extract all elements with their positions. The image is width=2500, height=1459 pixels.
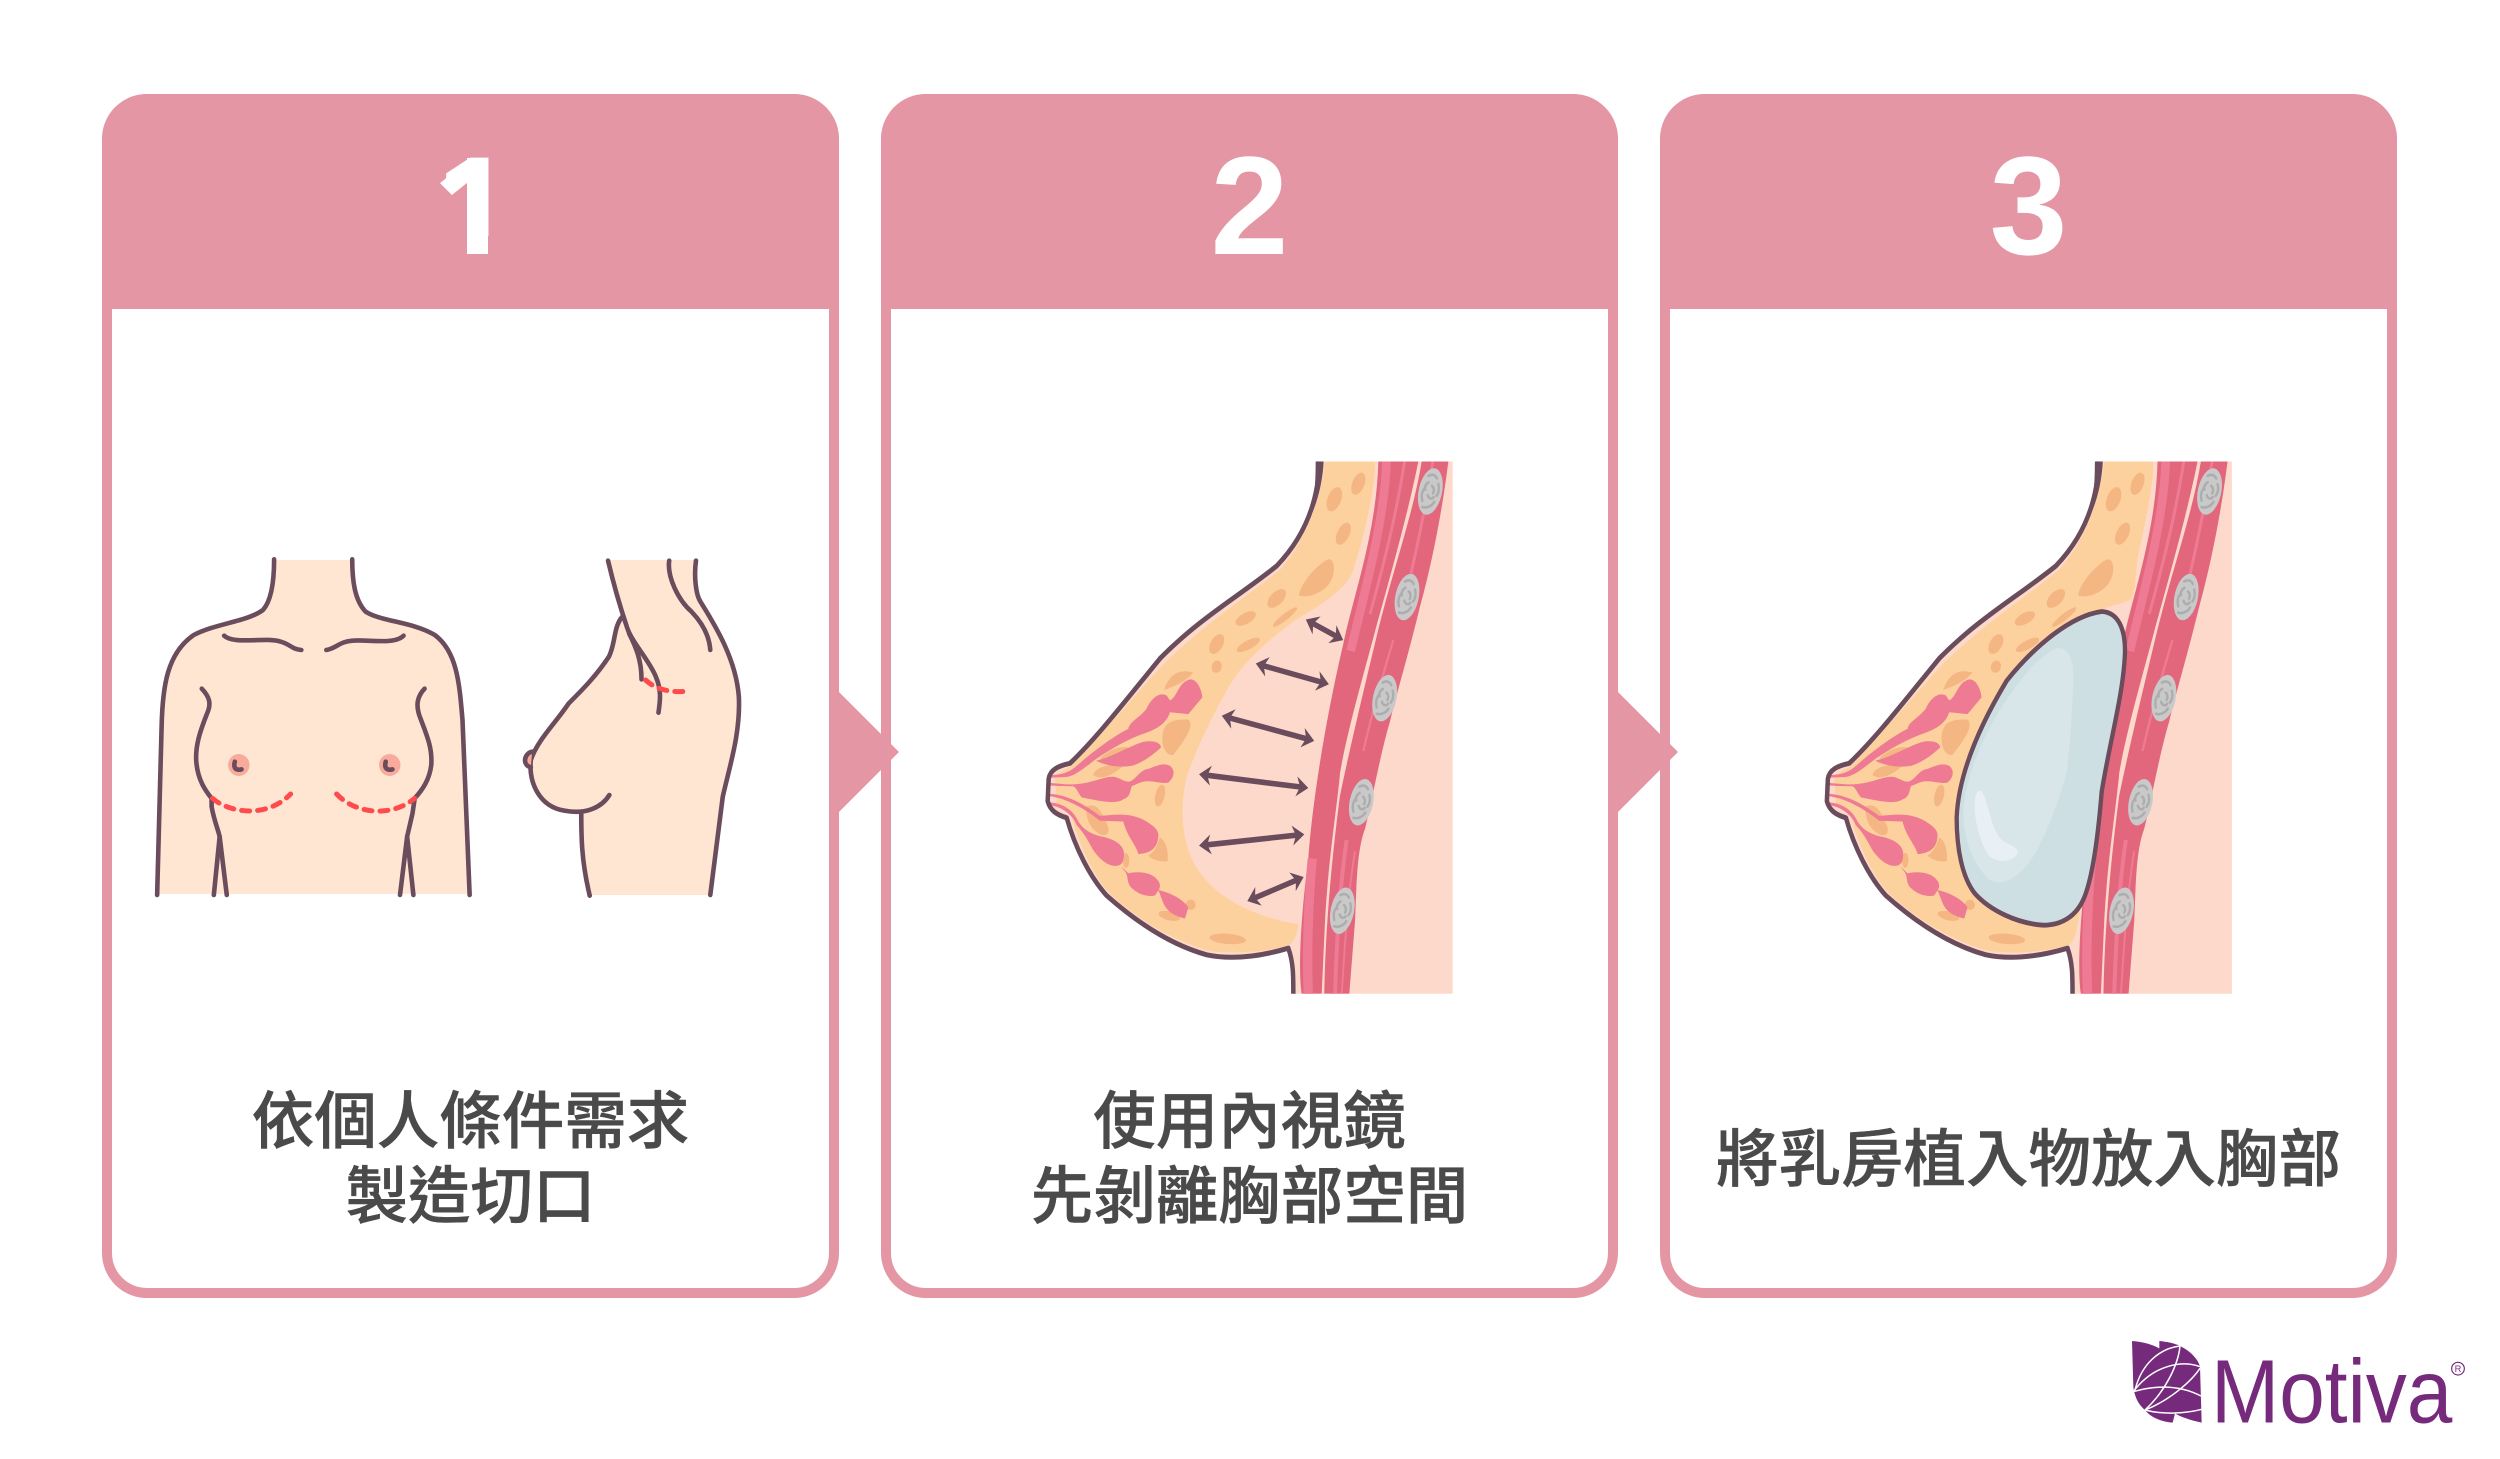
heading: step number 3: 3: [1990, 127, 2067, 284]
arrow: step 1 to step 2: [838, 691, 899, 813]
fatty tissue: [1834, 461, 2153, 952]
registered mark: [2452, 1362, 2464, 1375]
heading: step number 2: 2: [1211, 127, 1288, 284]
text: step 1 caption: 製造切口: [346, 1162, 596, 1232]
illustration: breast cross-section with implant: [1826, 459, 2232, 996]
arrow: step 2 to step 3: [1617, 691, 1678, 813]
illustration: breast cross-section with dissection arrows: [1047, 459, 1453, 996]
side torso: [525, 560, 739, 896]
dissection arrows: [1204, 622, 1339, 899]
text: step 3 caption: 將乳房植入物放入胸部: [1716, 1125, 2341, 1195]
icon: leaf mark: [2132, 1341, 2202, 1423]
illustration: front and side torso with incision lines: [157, 559, 739, 896]
heading: step number 1: 1: [437, 127, 514, 284]
text: step 2 caption: 先剝離胸部空間: [1031, 1162, 1468, 1232]
implant: [1957, 611, 2125, 925]
logo: Motiva: [2132, 1341, 2464, 1443]
panel: step 1 card: [102, 94, 839, 1298]
registered mark: R: [2455, 1364, 2462, 1374]
text: step 2 caption: 使用內視鏡: [1093, 1087, 1406, 1157]
text: step 1 caption: [252, 1087, 689, 1232]
text: step 1 caption: 依個人條件需求: [252, 1087, 689, 1157]
panel: step 3 card: [1660, 94, 2397, 1298]
heading: step number 2: [881, 94, 1618, 309]
fatty tissue: [1055, 461, 1375, 952]
panel: step 2 card: [881, 94, 1618, 1298]
heading: step number 1: [102, 94, 839, 309]
text: step 2 caption: [1031, 1087, 1468, 1232]
front torso: [157, 559, 470, 895]
heading: step number 3: [1660, 94, 2397, 309]
wordmark: Motiva: [2211, 1343, 2453, 1443]
